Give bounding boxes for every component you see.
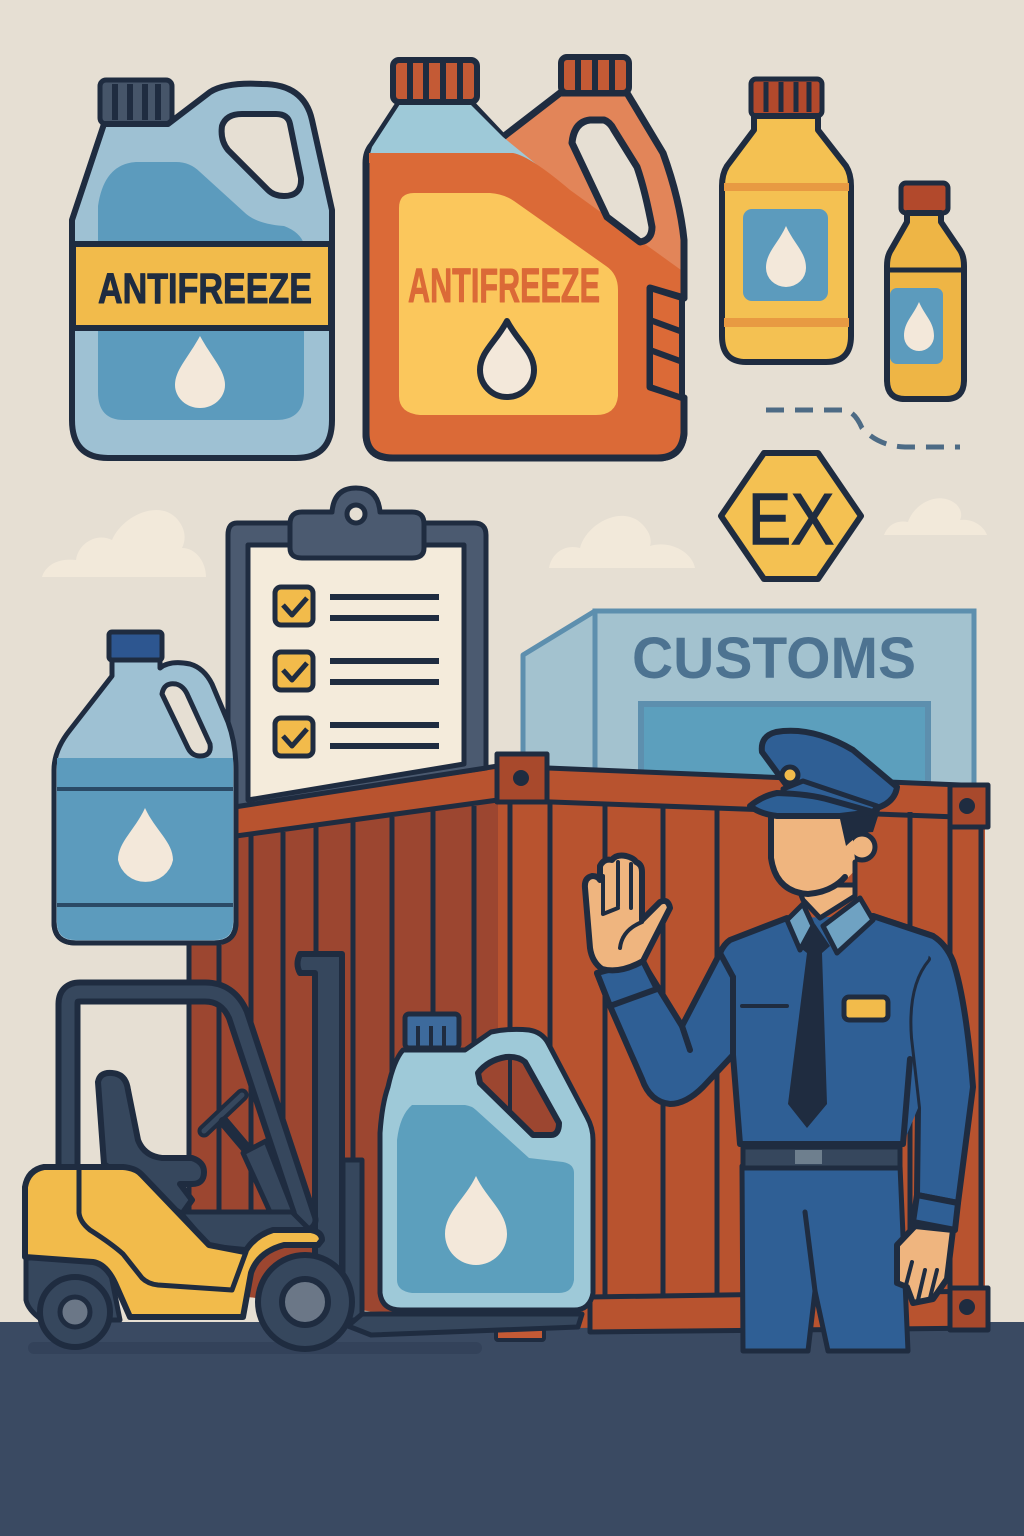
right edge	[978, 790, 984, 1320]
cap	[100, 80, 172, 124]
lowered hand	[897, 1226, 953, 1303]
left darker wall	[188, 796, 498, 1320]
tie	[788, 924, 830, 1128]
forklift	[25, 954, 582, 1349]
cap	[405, 1014, 459, 1048]
corrugation lines	[189, 800, 950, 1310]
collar left	[787, 904, 813, 950]
front blue jug	[380, 1014, 593, 1310]
liquid	[57, 758, 233, 940]
customs building	[523, 611, 974, 801]
neck	[797, 885, 855, 918]
medium yellow bottle	[722, 79, 851, 362]
container	[188, 754, 988, 1340]
outline redraw	[366, 163, 684, 458]
dashed route line	[766, 410, 960, 447]
finger lines	[603, 862, 642, 948]
mast	[298, 954, 342, 1290]
torso outline	[682, 916, 933, 1144]
body	[380, 1029, 593, 1310]
orange antifreeze jug	[366, 57, 684, 458]
drop	[118, 808, 173, 882]
drop	[766, 226, 806, 287]
handle hole	[222, 114, 301, 196]
corner block center	[497, 754, 547, 802]
collar right	[823, 898, 873, 953]
steering column	[224, 1122, 246, 1148]
hazard hexagon EX: EX	[748, 480, 834, 560]
raised arm	[597, 953, 733, 1104]
cap	[901, 183, 948, 213]
checklist row 3	[275, 718, 439, 756]
corner block bottom right	[950, 1288, 988, 1330]
hair	[838, 810, 880, 846]
far arm	[873, 916, 973, 1203]
cage inner	[68, 992, 306, 1220]
front wheel	[258, 1255, 352, 1349]
clipboard	[228, 488, 486, 808]
container foot	[496, 1326, 544, 1340]
body line	[79, 1168, 246, 1290]
label text: ANTIFREEZE	[408, 260, 600, 313]
seat	[98, 1073, 204, 1214]
band line	[888, 268, 963, 272]
ground	[0, 1322, 1024, 1536]
fork	[348, 1314, 582, 1335]
handle hole	[572, 120, 652, 242]
back cap	[561, 57, 629, 93]
cage outer	[68, 992, 306, 1220]
board	[228, 523, 486, 808]
floor	[180, 1212, 312, 1250]
liquid	[397, 1105, 574, 1293]
checklist row 1	[275, 587, 439, 625]
drop	[445, 1176, 507, 1265]
drop	[904, 302, 934, 351]
bottom rail	[590, 1291, 985, 1332]
customs sign: CUSTOMS	[632, 626, 916, 691]
clip	[290, 488, 424, 558]
rear wheel	[40, 1277, 110, 1347]
lowered fingers	[906, 1262, 937, 1300]
legs	[742, 1166, 908, 1351]
band lines	[57, 789, 233, 905]
corner block top right	[950, 785, 988, 827]
liquid	[98, 162, 304, 420]
ear	[849, 834, 875, 860]
drop	[480, 321, 534, 397]
doorway	[641, 704, 928, 794]
cloud left	[42, 510, 206, 577]
label	[399, 193, 618, 415]
stripes	[724, 183, 849, 327]
badge	[844, 997, 888, 1020]
label	[890, 288, 943, 364]
blue shoulder	[370, 104, 568, 190]
body	[887, 213, 964, 399]
body yellow	[25, 1167, 322, 1317]
orange body	[369, 153, 681, 455]
hat	[750, 731, 897, 816]
cowl	[243, 1141, 294, 1212]
pocket line	[742, 1004, 787, 1008]
paper	[248, 545, 464, 800]
ground shadow	[28, 1342, 482, 1354]
face	[771, 806, 855, 894]
checklist row 2	[275, 652, 439, 690]
container side	[188, 796, 985, 1330]
cloud right	[884, 498, 987, 535]
belt	[743, 1147, 900, 1168]
label	[743, 209, 828, 301]
steering wheel	[204, 1095, 242, 1131]
raised arm cuff	[597, 961, 657, 1006]
small yellow bottle	[887, 183, 964, 399]
side grip	[650, 288, 682, 398]
hazard hexagon EX	[721, 453, 861, 579]
large blue antifreeze jug	[72, 80, 332, 458]
cap	[751, 79, 822, 116]
label band	[73, 244, 331, 328]
top rail	[236, 766, 985, 836]
handle	[162, 684, 210, 756]
handle line	[508, 1058, 512, 1112]
left blue jug	[54, 632, 236, 943]
back mast	[343, 1160, 362, 1320]
cloud middle	[549, 516, 695, 568]
customs officer	[585, 731, 973, 1351]
jug body	[72, 84, 332, 458]
torso	[682, 916, 933, 1144]
front cap	[393, 60, 477, 102]
body	[722, 116, 851, 362]
right sleeve cuff	[913, 1195, 958, 1230]
seam	[805, 1212, 815, 1291]
raised hand	[585, 856, 670, 970]
jug outline and back section	[366, 93, 684, 458]
body lower	[26, 1258, 120, 1320]
handle	[478, 1057, 559, 1135]
body	[54, 660, 236, 943]
drop	[175, 336, 225, 408]
cap	[109, 632, 162, 660]
side wall	[523, 611, 595, 780]
label text: ANTIFREEZE	[98, 265, 312, 313]
